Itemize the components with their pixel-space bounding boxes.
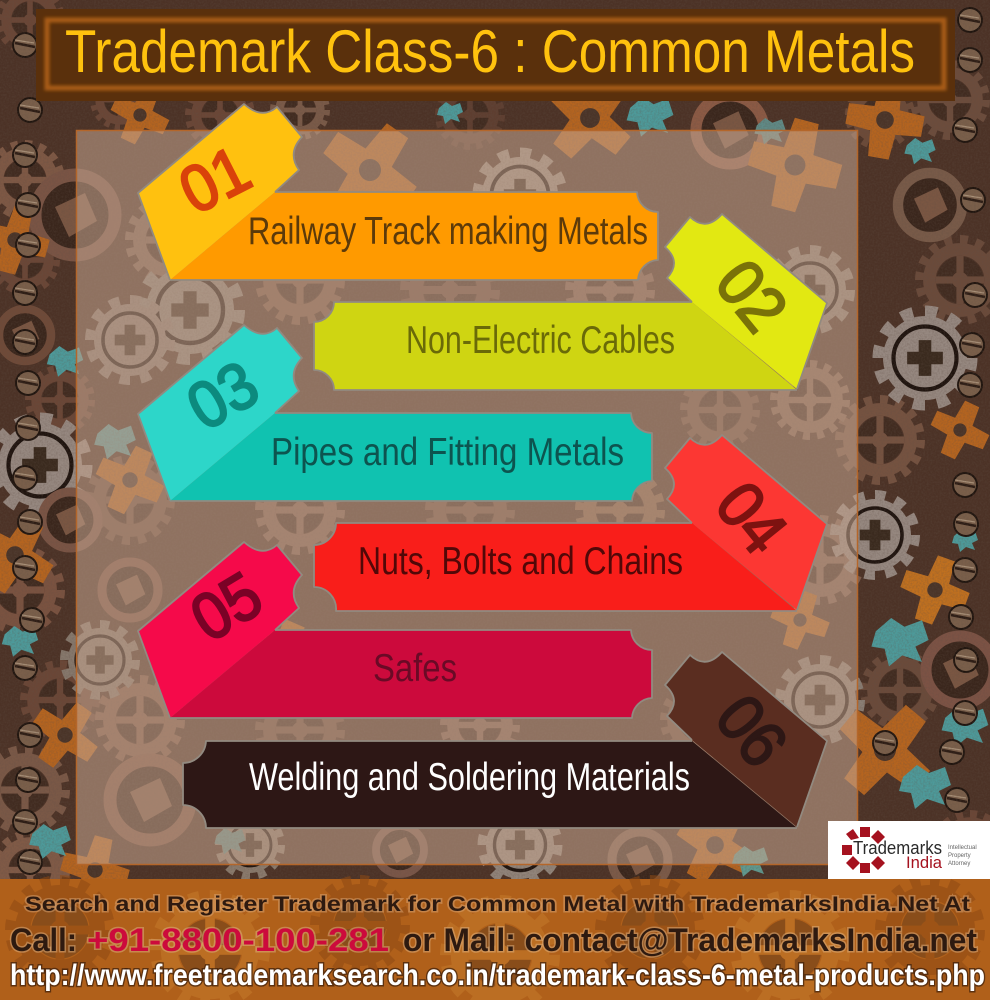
logo: Trademarks India: Attorney	[948, 861, 970, 867]
item 06: welding and soldering	[183, 652, 827, 828]
panel: translucent central area	[76, 130, 858, 864]
item 05: safes: Safes	[373, 647, 457, 690]
item 04: nuts, bolts and chains: Nuts, Bolts and Chains	[358, 540, 683, 583]
item 02: non-electric cables: 02	[702, 246, 802, 345]
item 06: welding and soldering: 06	[702, 681, 802, 780]
item 01: railway track: 01	[167, 131, 262, 228]
item 01: railway track: Railway Track making Metals	[248, 210, 648, 253]
decorative silver gears	[0, 153, 971, 882]
footer band	[0, 879, 990, 1000]
footer line 2: contact: or Mail: contact@TrademarksIndia.net	[403, 922, 977, 958]
icon: red diamond ring	[842, 827, 885, 873]
logo: Trademarks India: Trademarks	[853, 838, 942, 858]
decorative footer relief gears	[12, 881, 978, 1000]
item 04: nuts, bolts and chains: 04	[702, 468, 802, 567]
item 03: pipes and fittings: Pipes and Fitting Metals	[271, 431, 624, 474]
logo: Trademarks India	[828, 821, 990, 879]
title banner	[36, 9, 955, 101]
logo: Trademarks India: India	[906, 853, 943, 872]
logo: Trademarks India: Intellectual	[948, 845, 977, 851]
item 01: railway track	[138, 104, 658, 280]
logo: Trademarks India: Property	[948, 853, 971, 859]
footer line 2: contact: +91-8800-100-281	[87, 922, 389, 958]
decorative teal patina	[2, 97, 988, 877]
item 03: pipes and fittings: 03	[175, 346, 270, 444]
item 06: welding and soldering: Welding and Soldering Materials	[249, 756, 690, 799]
item 02: non-electric cables: Non-Electric Cables	[406, 319, 675, 362]
item 05: safes	[138, 542, 652, 718]
item 04: nuts, bolts and chains	[314, 435, 827, 611]
footer line 1: Search and Register Trademark for Common Metal with TrademarksIndia.Net At	[25, 893, 970, 916]
item 03: pipes and fittings	[138, 325, 652, 501]
footer line 2: contact	[10, 922, 977, 958]
footer line 2: contact: Call:	[10, 922, 77, 958]
item 02: non-electric cables	[314, 214, 827, 390]
item 05: safes: 05	[178, 557, 274, 656]
